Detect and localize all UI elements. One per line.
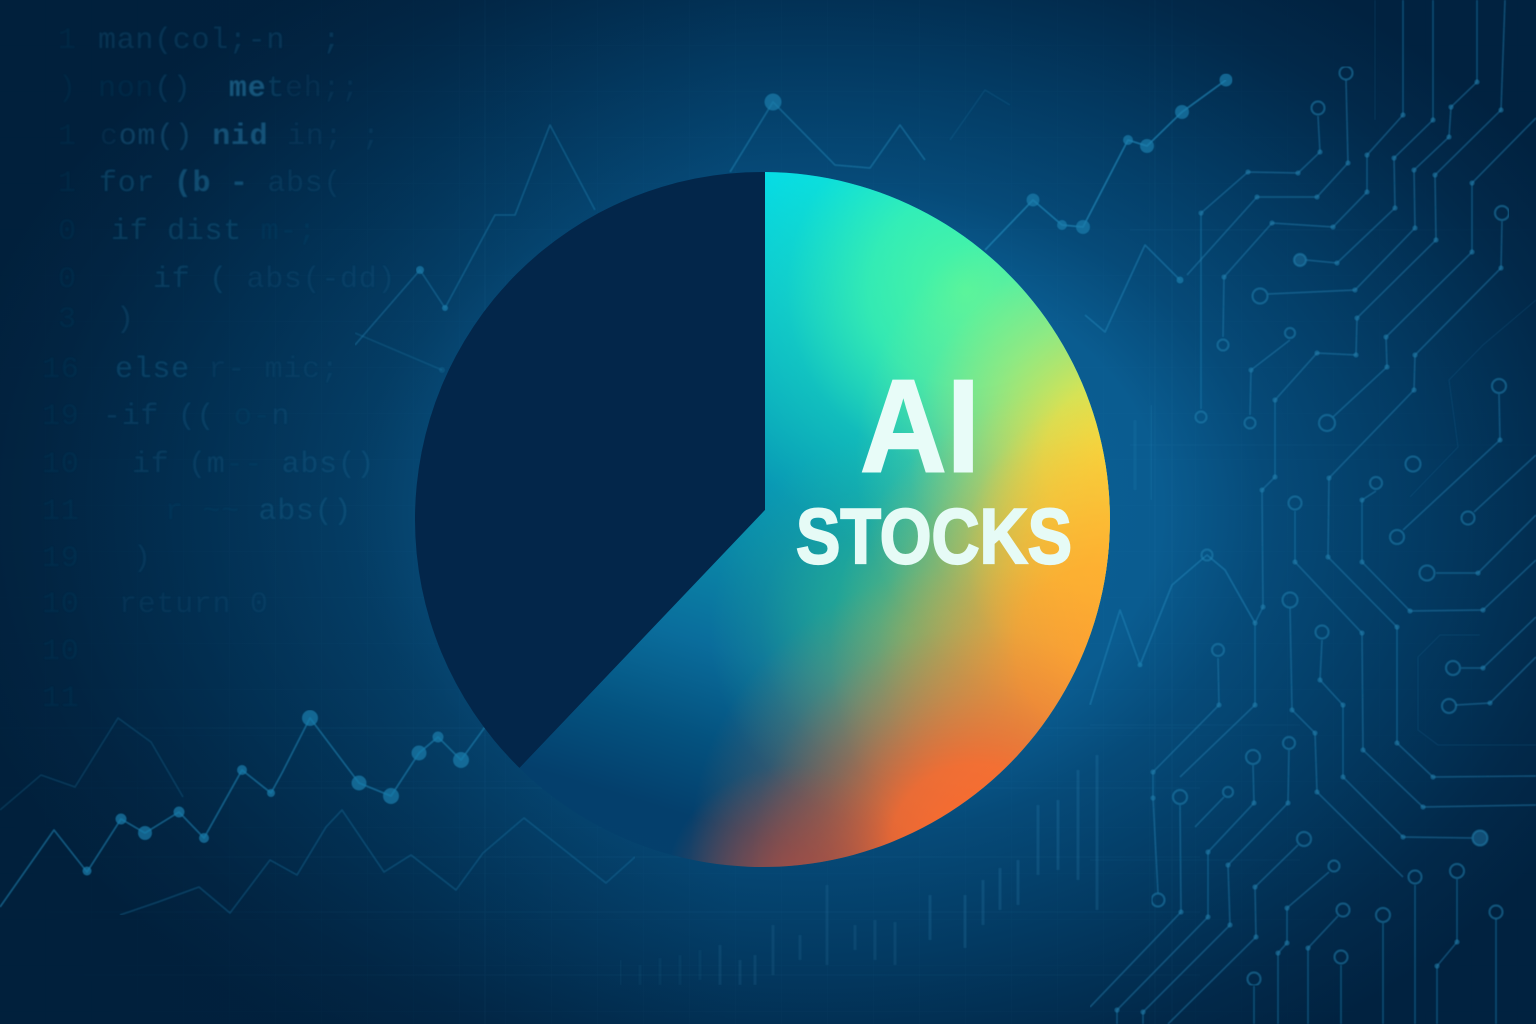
code text block: if ( abs(-dd) <box>153 263 396 297</box>
code text block: else r- mic; <box>115 353 339 387</box>
code text block: 0 <box>58 215 77 249</box>
label: AI: AI <box>860 352 980 500</box>
code text block: 10 <box>42 588 79 622</box>
code text block: 1 <box>58 120 77 154</box>
label: STOCKS: STOCKS <box>796 492 1072 580</box>
code text block: -if (( o-n <box>103 400 290 434</box>
code text block: r ~~ abs() <box>165 495 352 529</box>
code text block: 10 <box>42 635 79 669</box>
code text block: if (m-- abs() <box>132 448 375 482</box>
candlestick bars <box>620 405 1152 985</box>
pie dark segment <box>415 172 765 768</box>
code text block: 11 <box>42 682 79 716</box>
lower left line charts <box>0 710 635 915</box>
code text block: ) <box>58 72 77 106</box>
code text block: 1 <box>58 24 77 58</box>
chart nodes <box>416 74 1232 668</box>
code text block <box>42 24 396 716</box>
code text block: 16 <box>42 353 79 387</box>
code text block: ) <box>133 542 152 576</box>
code text block: 19 <box>42 400 79 434</box>
code text block: for (b - abs( <box>99 167 342 201</box>
code text block: 0 <box>58 263 77 297</box>
pie chart <box>415 172 1110 867</box>
code text block: non() meteh;; <box>98 72 360 106</box>
code text block: ) <box>116 303 135 337</box>
pie gradient segment <box>528 172 1110 867</box>
code text block: 3 <box>58 303 77 337</box>
code text block: if dist m-; <box>111 215 317 249</box>
code text block: 10 <box>42 448 79 482</box>
circuit nodes <box>1152 66 1509 986</box>
code text block: return 0 <box>119 588 269 622</box>
code text block: com() nid in; ; <box>100 120 381 154</box>
code text block: 11 <box>42 495 79 529</box>
upper line charts <box>355 80 1255 705</box>
code text block: 1 <box>58 167 77 201</box>
code text block: 19 <box>42 542 79 576</box>
code text block: man(col;-n ; <box>98 24 341 58</box>
circuit board traces <box>1090 0 1536 1024</box>
